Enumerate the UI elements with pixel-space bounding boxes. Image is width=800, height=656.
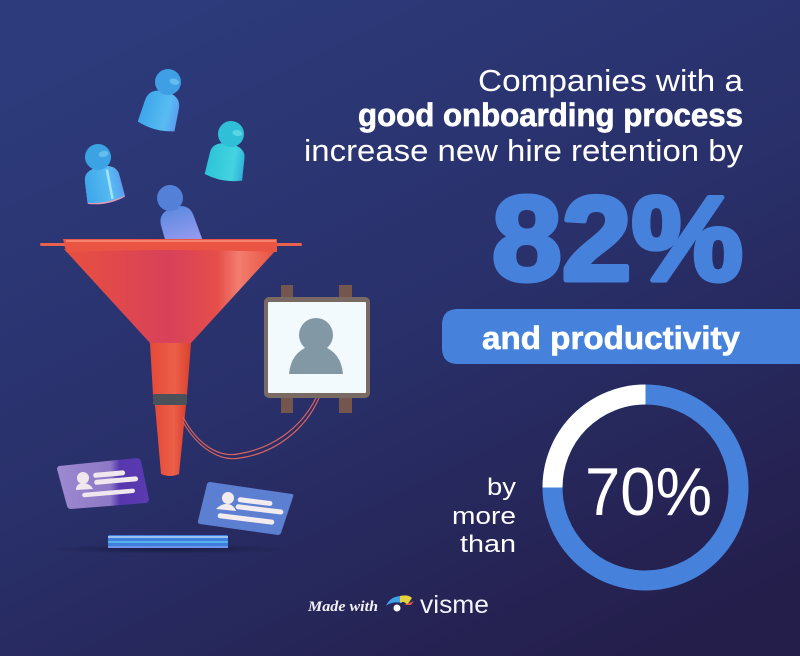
funnel stem band — [153, 394, 187, 405]
funnel — [40, 239, 302, 476]
heading: headline text — [304, 63, 744, 168]
footer: Made with visme — [307, 591, 489, 619]
banner: and productivity: and productivity — [482, 320, 740, 356]
donut value: 70% — [585, 454, 712, 530]
stack shadow — [48, 544, 288, 554]
icon: person figure right — [204, 118, 252, 184]
funnel side tabs — [40, 243, 302, 246]
funnel cone — [64, 249, 277, 343]
icon: avatar silhouette — [289, 318, 343, 374]
funnel rim — [63, 239, 277, 252]
illustration: funnel with people and cards — [40, 65, 370, 554]
card stack — [108, 535, 228, 548]
icon: visme logo — [386, 595, 414, 612]
stat: 82%: 82% — [492, 172, 743, 306]
label: by more than: than — [460, 531, 516, 558]
wires — [183, 398, 319, 459]
funnel stem upper — [150, 343, 191, 395]
blue ID card — [198, 482, 293, 535]
label: by more than — [452, 474, 516, 558]
label: by more than: by — [487, 474, 516, 501]
donut chart: 70% — [552, 394, 738, 580]
visme wordmark: visme — [420, 591, 489, 619]
icon: person figure left — [77, 141, 126, 207]
made with script: Made with — [307, 599, 378, 615]
heading line 1: Companies with a — [478, 63, 744, 98]
heading line 2 bold: good onboarding process — [358, 97, 743, 133]
icon: person figure top — [137, 65, 190, 134]
icon: person figure entering funnel — [149, 180, 203, 251]
profile frame — [264, 285, 370, 413]
heading line 3: increase new hire retention by — [304, 133, 744, 168]
purple ID card — [57, 458, 149, 509]
label: by more than: more — [452, 503, 516, 530]
banner: and productivity — [442, 309, 800, 364]
funnel stem tip — [155, 405, 186, 476]
